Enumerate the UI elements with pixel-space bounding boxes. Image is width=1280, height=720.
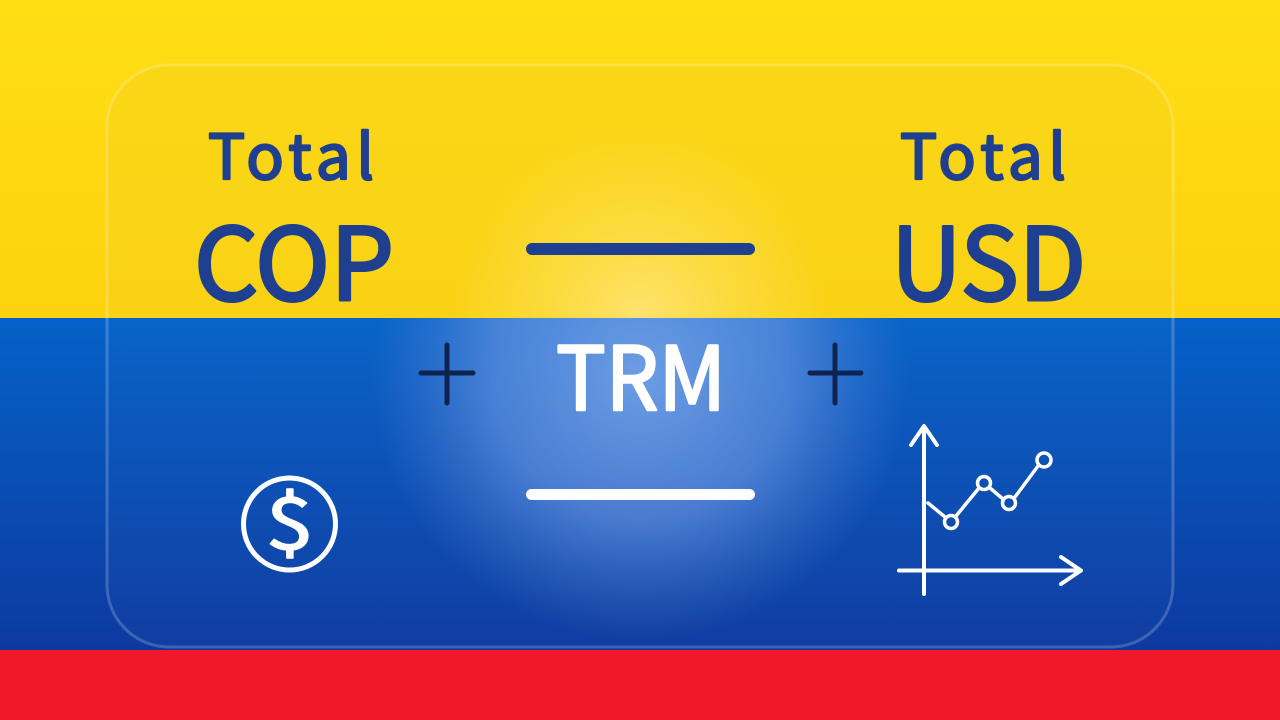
heading: Total COP [194, 107, 394, 329]
background: yellow band [0, 0, 1280, 318]
background: blue band [0, 318, 1280, 650]
icon: dollar coin: $ [266, 465, 314, 570]
plus sign: right [810, 345, 861, 403]
label: TRM: TRM [556, 309, 726, 436]
plus sign: left [421, 345, 473, 403]
heading: Total COP: COP [194, 184, 394, 329]
fraction bar: bottom [526, 489, 755, 500]
icon: dollar coin [244, 465, 336, 570]
heading: Total USD: Total [900, 107, 1066, 197]
heading: Total USD: USD [891, 184, 1086, 329]
heading: Total COP: Total [208, 107, 374, 197]
panel: frosted glass card [107, 65, 1173, 647]
chart data line [928, 453, 1051, 528]
icon: line chart with axes [899, 426, 1081, 594]
fraction bar: top [526, 243, 755, 255]
background: red band [0, 650, 1280, 720]
heading: Total USD [891, 107, 1086, 329]
chart axes [899, 426, 1081, 594]
